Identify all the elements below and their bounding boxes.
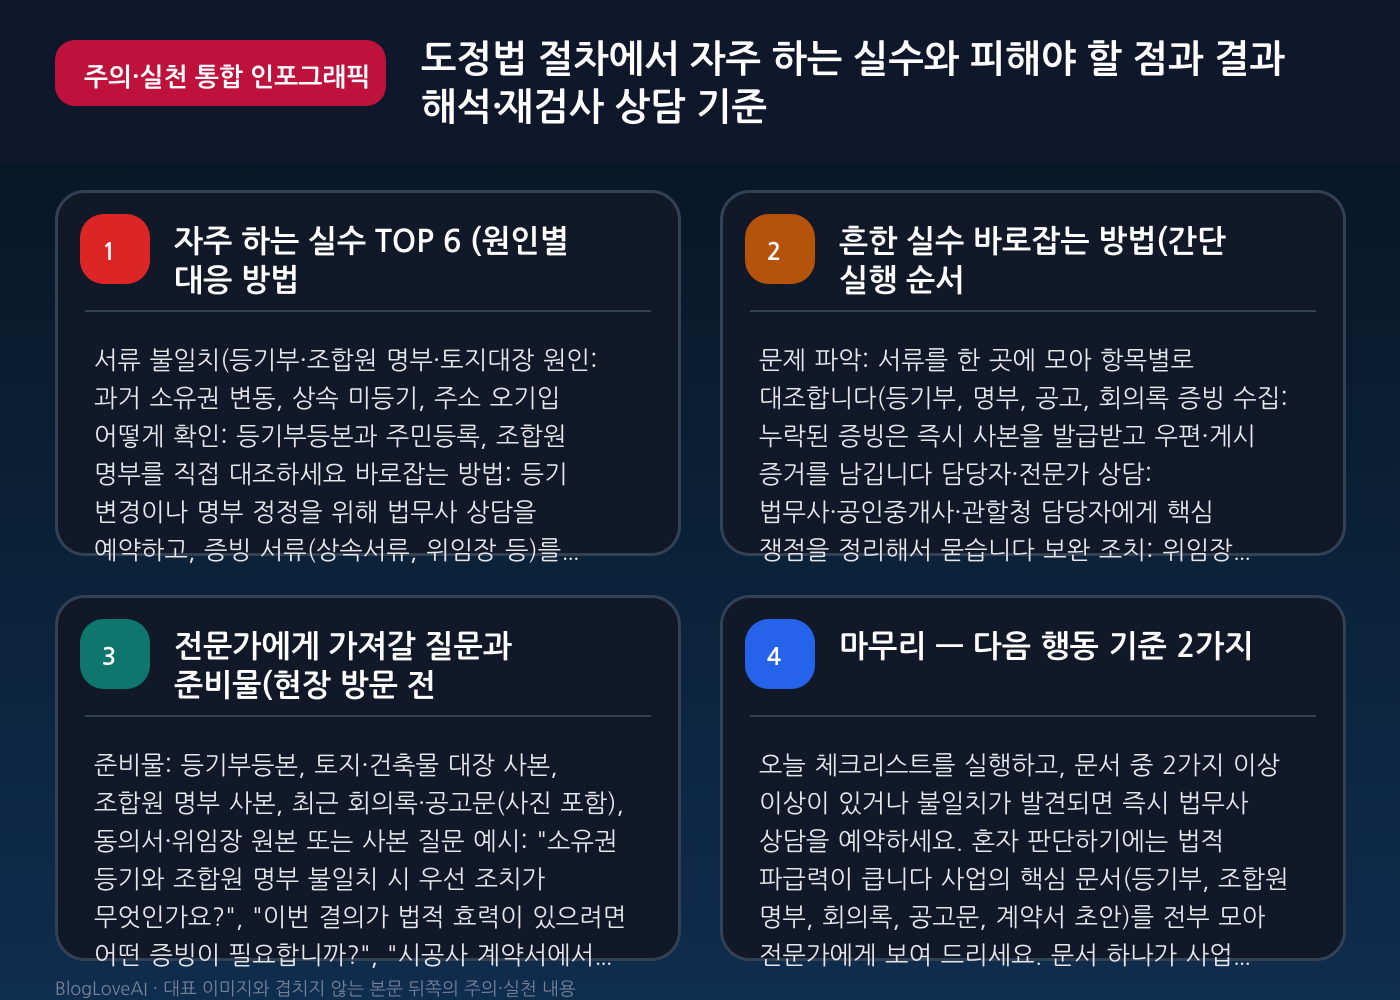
body text 4: 상담을 예약하세요. 혼자 판단하기에는 법적 <box>759 829 1224 854</box>
body text 1: 명부를 직접 대조하세요 바로잡는 방법: 등기 <box>94 462 568 487</box>
heading 3 <box>174 630 512 701</box>
heading 1 <box>174 226 569 296</box>
body text 3: 어떤 증빙이 필요합니까?", "시공사 계약서에서... <box>94 943 611 968</box>
body text 2: 누락된 증빙은 즉시 사본을 발급받고 우편·게시 <box>759 424 1256 449</box>
heading 1: 자주 하는 실수 TOP 6 (원인별 <box>174 226 569 257</box>
body text 3: 동의서·위임장 원본 또는 사본 질문 예시: "소유권 <box>94 829 618 854</box>
body text 1: 과거 소유권 변동, 상속 미등기, 주소 오기입 <box>94 386 560 411</box>
body text 2: 쟁점을 정리해서 묻습니다 보완 조치: 위임장... <box>759 538 1249 563</box>
body text 3: 무엇인가요?", "이번 결의가 법적 효력이 있으려면 <box>94 905 626 930</box>
body text 3: 등기와 조합원 명부 불일치 시 우선 조치가 <box>94 867 545 892</box>
body text 1: 변경이나 명부 정정을 위해 법무사 상담을 <box>94 500 537 525</box>
body text 2: 대조합니다(등기부, 명부, 공고, 회의록 증빙 수집: <box>759 386 1288 411</box>
body text 4: 전문가에게 보여 드리세요. 문서 하나가 사업... <box>759 943 1249 968</box>
header band <box>0 0 1400 163</box>
heading 2 <box>839 226 1226 296</box>
body text 1: 어떻게 확인: 등기부등본과 주민등록, 조합원 <box>94 424 567 449</box>
number badge 3: 3 <box>102 645 116 669</box>
number badge 3 <box>80 619 150 689</box>
number badge 1: 1 <box>102 240 116 264</box>
body text 4: 이상이 있거나 불일치가 발견되면 즉시 법무사 <box>759 791 1249 816</box>
heading 1: 대응 방법 <box>174 265 299 296</box>
body text 4: 파급력이 큽니다 사업의 핵심 문서(등기부, 조합원 <box>759 867 1289 892</box>
heading 2: 흔한 실수 바로잡는 방법(간단 <box>839 226 1226 257</box>
body text 2 <box>759 348 1288 563</box>
badge: 주의·실천 통합 인포그래픽 <box>84 64 370 90</box>
body text 2: 증거를 남깁니다 담당자·전문가 상담: <box>759 462 1152 487</box>
title <box>421 40 1285 126</box>
body text 4: 오늘 체크리스트를 실행하고, 문서 중 2가지 이상 <box>759 753 1280 778</box>
title: 해석·재검사 상담 기준 <box>421 88 767 126</box>
number badge 4: 4 <box>767 645 781 669</box>
body text 2: 문제 파악: 서류를 한 곳에 모아 항목별로 <box>759 348 1194 373</box>
heading 3: 전문가에게 가져갈 질문과 <box>174 631 512 662</box>
body text 1 <box>94 348 597 563</box>
number badge 2 <box>745 214 815 284</box>
footer note: BlogLoveAI · 대표 이미지와 겹치지 않는 본문 뒤쪽의 주의·실천 내용 <box>55 980 576 998</box>
badge <box>55 40 386 106</box>
panel: 2 how to fix <box>720 190 1346 556</box>
body text 3 <box>94 753 626 968</box>
heading 3: 준비물(현장 방문 전 <box>174 670 436 701</box>
body text 1: 예약하고, 증빙 서류(상속서류, 위임장 등)를... <box>94 538 578 563</box>
panel: 1 common mistakes <box>55 190 681 556</box>
number badge 2: 2 <box>767 240 781 264</box>
body text 3: 준비물: 등기부등본, 토지·건축물 대장 사본, <box>94 753 558 778</box>
heading 2: 실행 순서 <box>839 265 964 296</box>
body text 2: 법무사·공인중개사·관할청 담당자에게 핵심 <box>759 500 1214 525</box>
body text 3: 조합원 명부 사본, 최근 회의록·공고문(사진 포함), <box>94 791 624 816</box>
body text 4: 명부, 회의록, 공고문, 계약서 초안)를 전부 모아 <box>759 905 1265 930</box>
panel: 4 closing <box>720 595 1346 961</box>
heading 4: 마무리 — 다음 행동 기준 2가지 <box>839 631 1254 662</box>
body text 4 <box>759 753 1289 968</box>
number badge 1 <box>80 214 150 284</box>
panel: 3 questions for experts <box>55 595 681 961</box>
number badge 4 <box>745 619 815 689</box>
body text 1: 서류 불일치(등기부·조합원 명부·토지대장 원인: <box>94 348 597 373</box>
title: 도정법 절차에서 자주 하는 실수와 피해야 할 점과 결과 <box>421 40 1285 78</box>
